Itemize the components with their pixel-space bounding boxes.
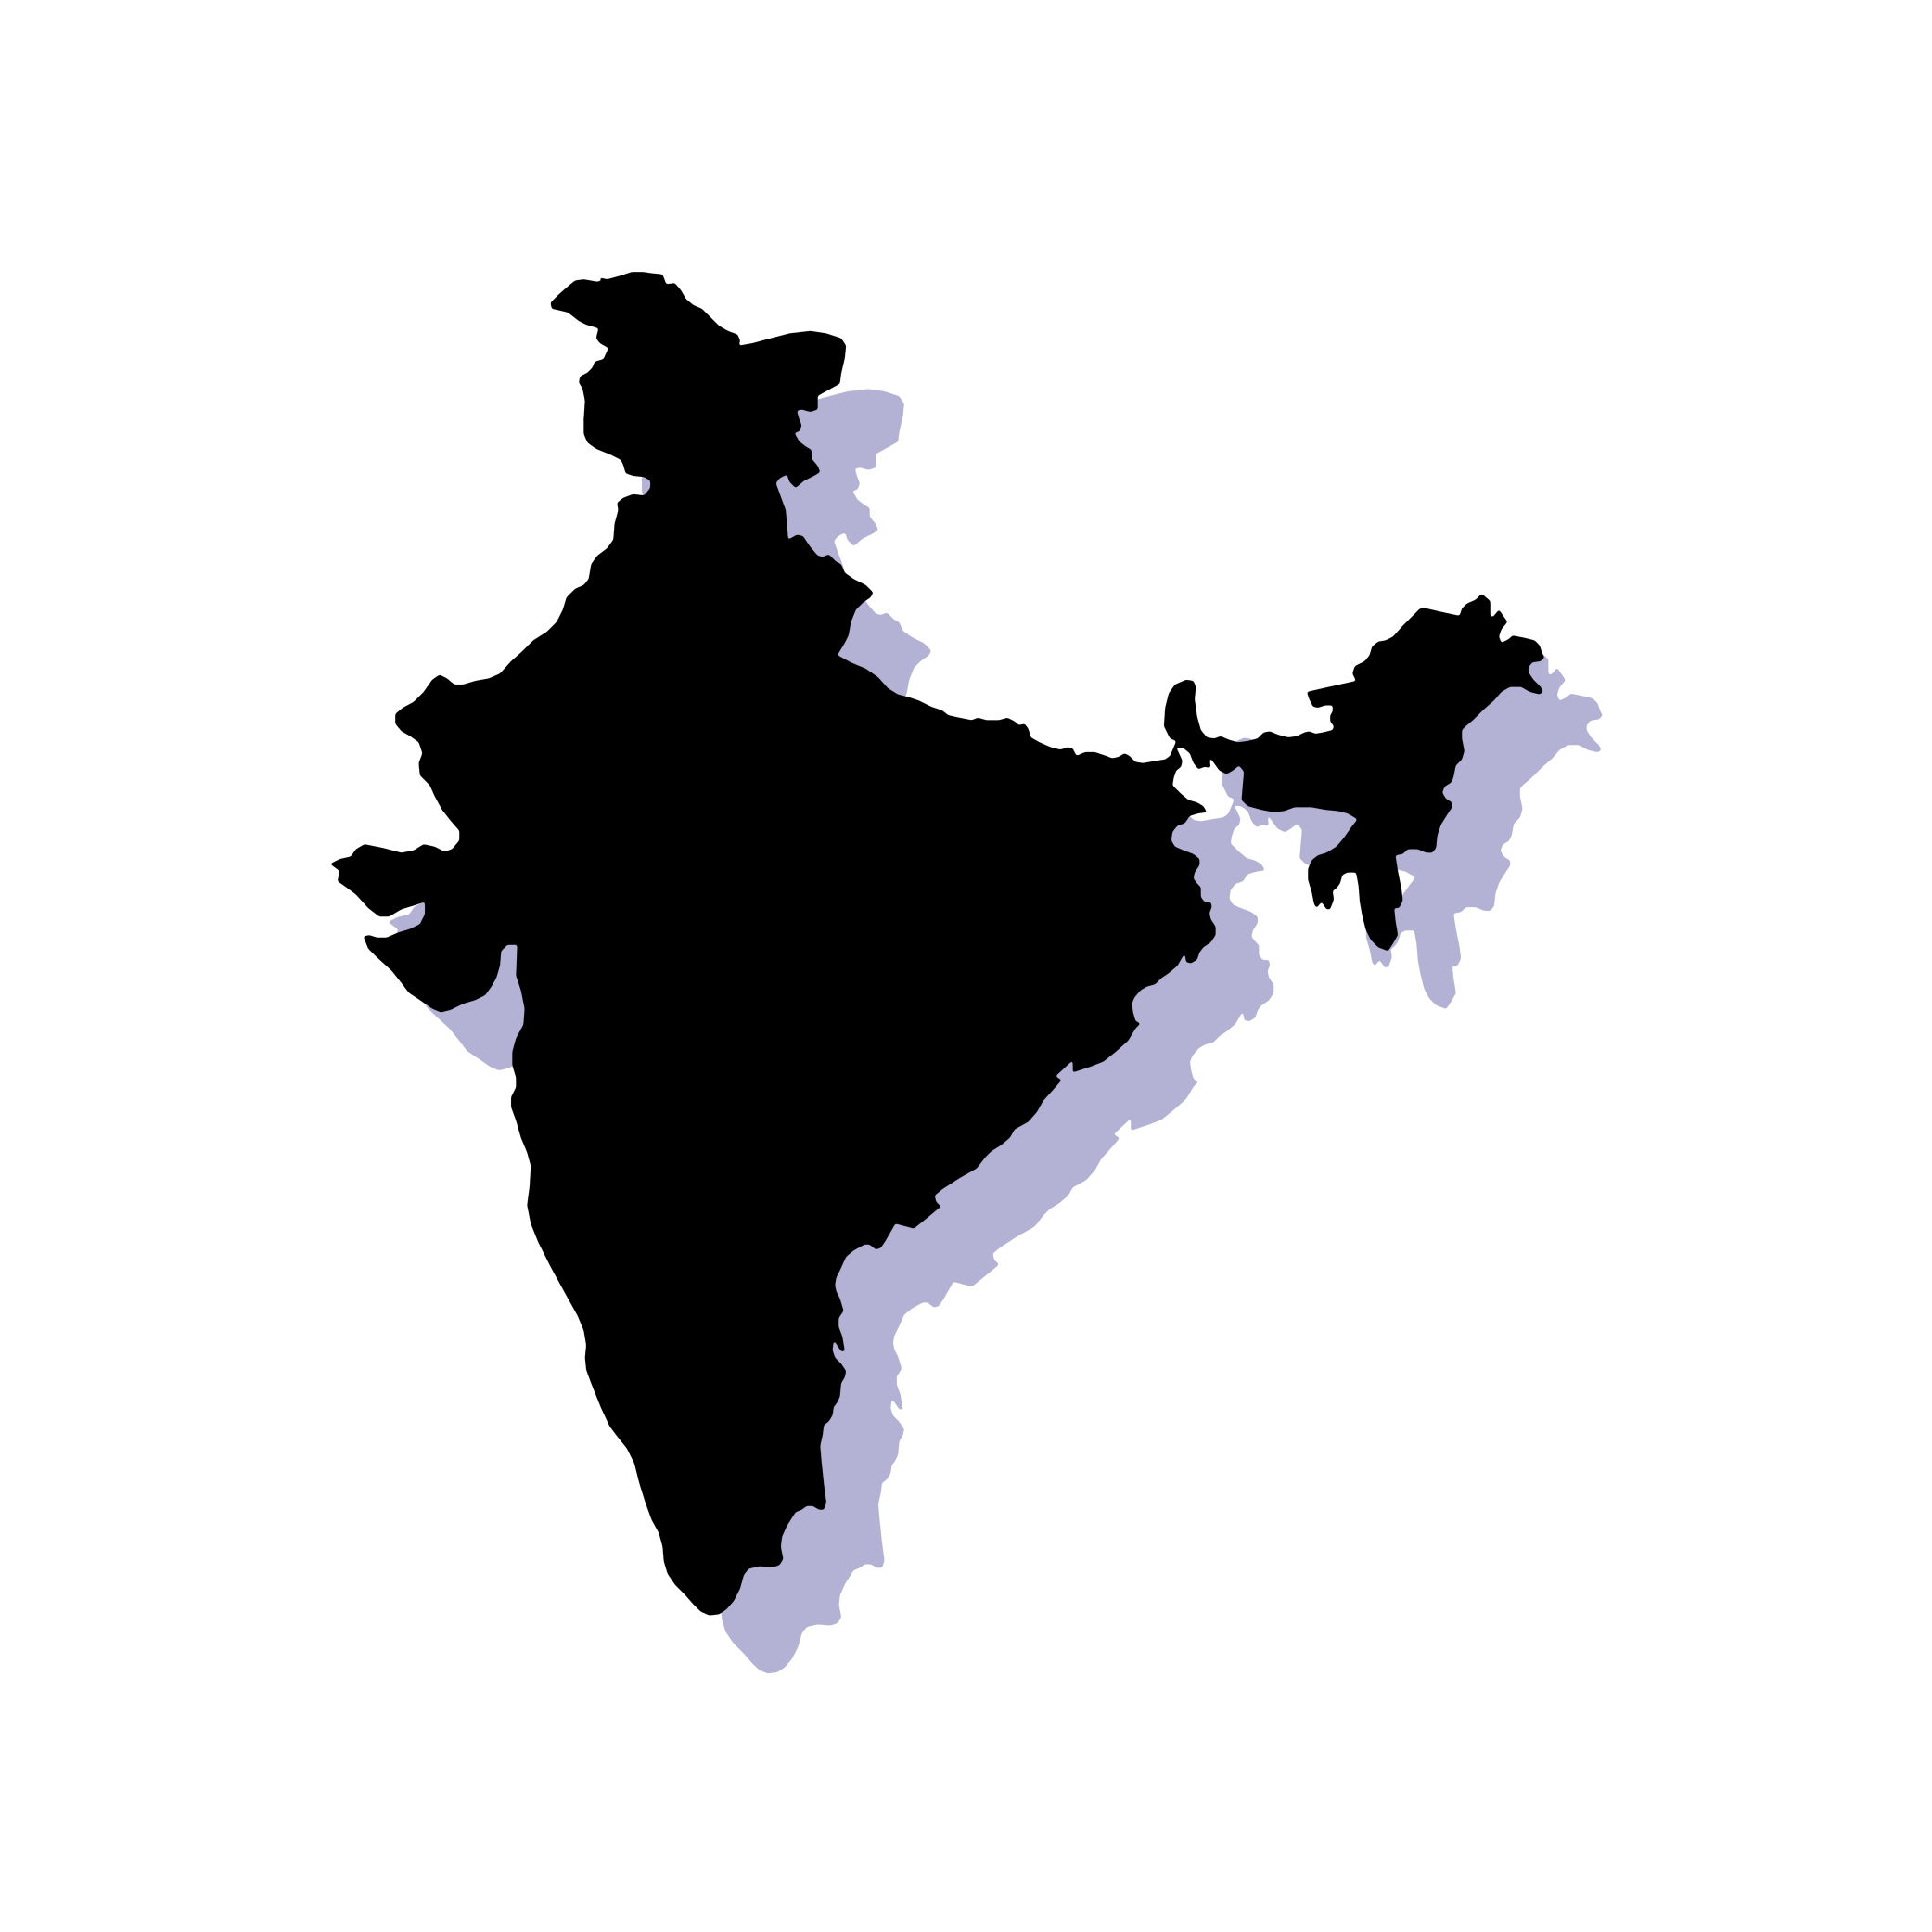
map shadow: lavender offset silhouette [388, 330, 1603, 1673]
map: black India silhouette [330, 272, 1544, 1616]
